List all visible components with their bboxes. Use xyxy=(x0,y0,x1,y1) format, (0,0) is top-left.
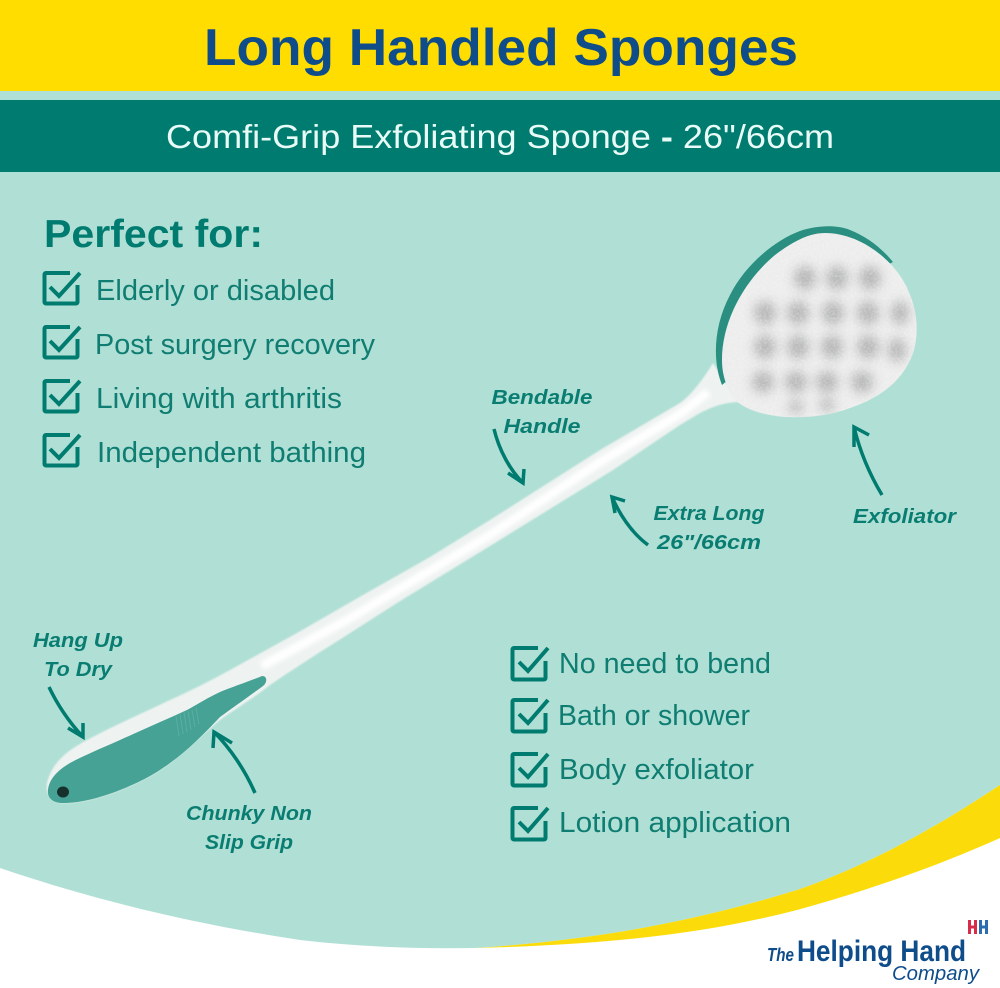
item: bath or shower: Bath or shower xyxy=(558,700,750,732)
logo: the helping hand company: Helping Hand xyxy=(797,935,966,968)
callout: chunky non slip grip xyxy=(186,732,312,854)
sponge backing xyxy=(716,226,893,385)
heading: perfect for: Perfect for: xyxy=(44,213,263,256)
callout: chunky non slip grip: Chunky Non xyxy=(186,802,312,825)
logo: the helping hand company: Company xyxy=(892,963,980,985)
callout: exfoliator xyxy=(853,427,957,528)
callout: extra long: 26"/66cm xyxy=(656,531,761,554)
callout: exfoliator: Exfoliator xyxy=(853,505,957,528)
callout: hang up to dry xyxy=(33,629,123,737)
grip xyxy=(48,676,266,803)
subtitle band: Comfi-Grip Exfoliating Sponge - 26"/66cm xyxy=(166,118,834,155)
subtitle band xyxy=(0,100,1000,172)
handle highlight xyxy=(262,392,708,666)
list: perfect for xyxy=(44,273,375,469)
item: no need to bend: No need to bend xyxy=(559,648,771,680)
callout: hang up to dry: Hang Up xyxy=(33,629,123,652)
hang hole xyxy=(57,786,69,798)
item: living with arthritis: Living with arthritis xyxy=(96,383,342,415)
white bottom curve xyxy=(0,785,1000,988)
logo: the helping hand company: The xyxy=(767,945,794,965)
title banner xyxy=(0,0,1000,91)
item: lotion application: Lotion application xyxy=(559,807,791,839)
product: long handled sponge xyxy=(47,226,920,803)
yellow swoosh xyxy=(475,785,1000,948)
callout: extra long: Extra Long xyxy=(654,502,765,525)
callout: extra long xyxy=(612,497,765,554)
title banner: Long Handled Sponges xyxy=(204,19,798,77)
sponge face xyxy=(722,233,917,417)
callout: chunky non slip grip: Slip Grip xyxy=(205,831,293,854)
item: body exfoliator: Body exfoliator xyxy=(559,754,754,786)
handle xyxy=(47,363,738,803)
logo: the helping hand company xyxy=(767,920,986,985)
callout: hang up to dry: To Dry xyxy=(44,658,114,681)
grip ribs xyxy=(176,708,199,736)
list: benefits xyxy=(512,648,791,840)
sponge speckle xyxy=(722,236,910,414)
logo icon: HH xyxy=(970,920,986,934)
sponge dimples xyxy=(722,236,914,417)
item: elderly or disabled: Elderly or disabled xyxy=(96,275,335,307)
callout: bendable handle xyxy=(492,386,592,483)
item: post surgery recovery: Post surgery recovery xyxy=(95,329,375,361)
item: independent bathing: Independent bathing xyxy=(97,437,366,469)
callout: bendable handle: Handle xyxy=(504,415,580,438)
callout: bendable handle: Bendable xyxy=(492,386,592,409)
